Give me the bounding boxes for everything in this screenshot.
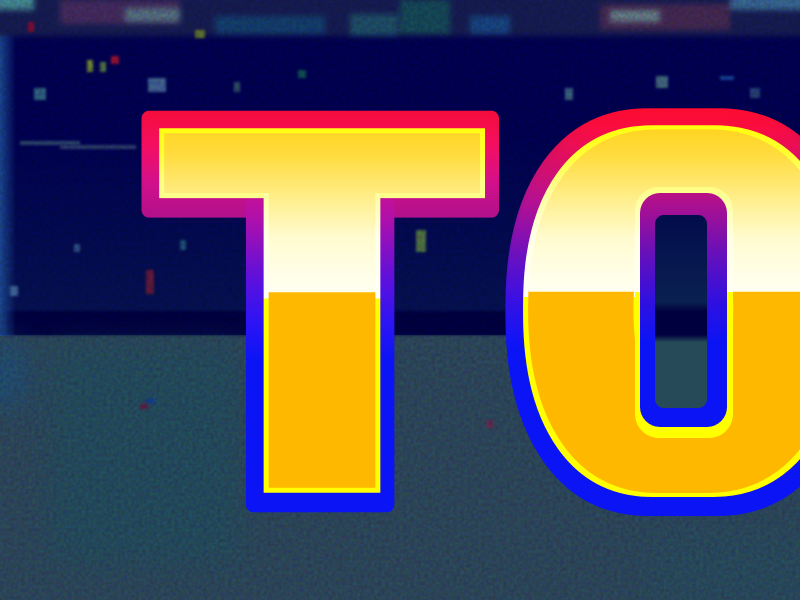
band: blurred crowd at top: [0, 0, 800, 36]
title text: T: [177, 25, 466, 597]
T face layer: T: [178, 25, 466, 596]
title text: O: [538, 24, 800, 596]
T rim layer: T: [178, 25, 466, 596]
O counter: rim, outline and see-through centre: [635, 187, 733, 438]
specks: confetti in the dark area: [10, 22, 760, 428]
T outline layer: T: [177, 26, 464, 597]
